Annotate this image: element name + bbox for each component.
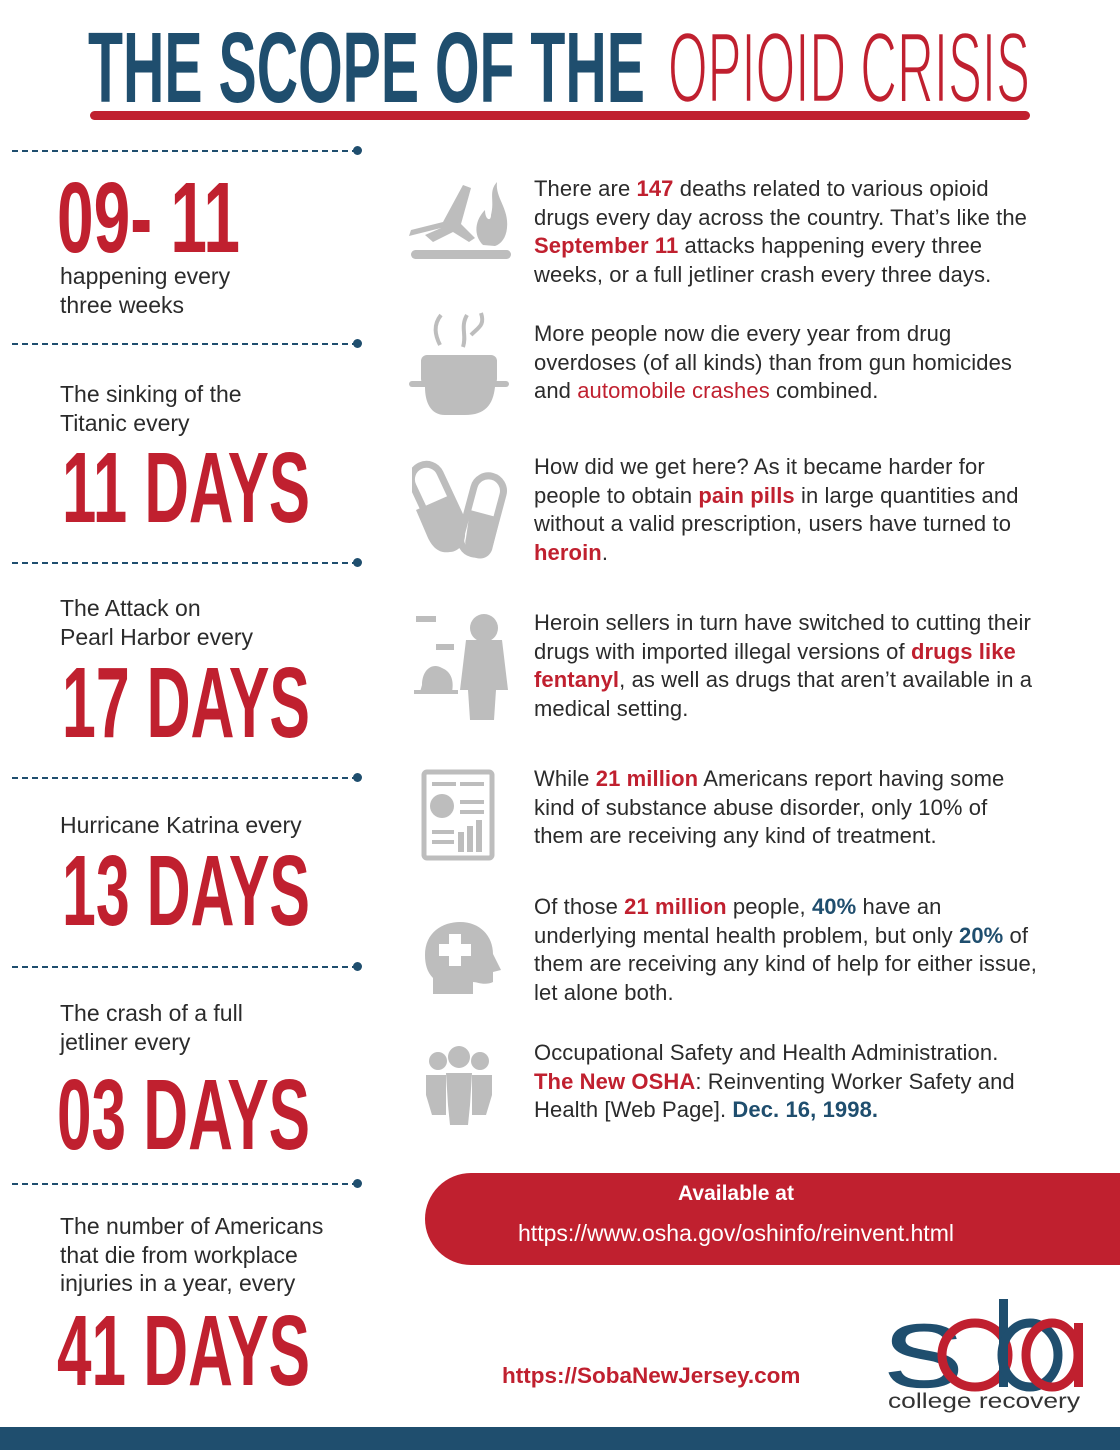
text: 21 million: them are receiving any kind of treatment. (534, 823, 937, 848)
stat: Katrina (60, 812, 310, 933)
text: mental health: let alone both. (534, 980, 674, 1005)
text: mental health (534, 894, 1037, 1005)
text: mental health: underlying mental health problem, but only 20% of (534, 923, 1028, 948)
callout: available at: Available at (678, 1182, 794, 1205)
stat: workplace: The number of Americans (60, 1213, 323, 1239)
stat: jetliner (57, 1000, 310, 1157)
text: how did we get here: How did we get here? As it became harder for (534, 454, 985, 479)
icon: report (422, 770, 494, 860)
text: mental health: them are receiving any kind of help for either issue, (534, 951, 1037, 976)
stat: Katrina: Hurricane Katrina every (60, 812, 302, 838)
text: 21 million (534, 766, 1004, 848)
callout: available at: https://www.osha.gov/oshinfo/reinvent.html (518, 1220, 954, 1246)
text: overdoses: overdoses (of all kinds) than from gun homicides (534, 350, 1012, 375)
text: 21 million: While 21 million Americans report having some (534, 766, 1004, 791)
text: mental health: Of those 21 million people, 40% have an (534, 894, 942, 919)
stat: Pearl Harbor (60, 595, 310, 745)
stat: Titanic (60, 381, 310, 530)
text: 147 deaths: There are 147 deaths related to various opioid (534, 176, 989, 201)
text: fentanyl: fentanyl, as well as drugs that aren’t available in a (534, 667, 1032, 692)
stat: workplace: that die from workplace (60, 1242, 298, 1268)
text: 147 deaths: September 11 attacks happening every three (534, 233, 982, 258)
text: 21 million: kind of substance abuse disorder, only 10% of (534, 795, 987, 820)
website link: https://SobaNewJersey.com (502, 1363, 800, 1388)
text: OSHA source: Health [Web Page]. Dec. 16, 1998. (534, 1097, 878, 1122)
text: overdoses (534, 321, 1012, 403)
stat: 09-11 (57, 170, 240, 318)
stat: Pearl Harbor: Pearl Harbor every (60, 624, 253, 650)
logo: soba (884, 1295, 1083, 1413)
footer bar (0, 1427, 1120, 1450)
text: overdoses: and automobile crashes combined. (534, 378, 878, 403)
stat: Pearl Harbor: The Attack on (60, 595, 201, 621)
text: how did we get here: without a valid prescription, users have turned to (534, 511, 1011, 536)
title: THE SCOPE OF THE (88, 12, 645, 124)
stat: 09-11: happening every (60, 263, 230, 289)
text: 147 deaths: drugs every day across the country. That’s like the (534, 205, 1027, 230)
text: OSHA source: Occupational Safety and Health Administration. (534, 1040, 998, 1065)
stat: jetliner: jetliner every (60, 1029, 190, 1055)
icon: pills (412, 460, 507, 558)
stat: workplace: injuries in a year, every (60, 1270, 295, 1296)
text: 147 deaths (534, 176, 1027, 287)
stat: 09-11: three weeks (60, 292, 184, 318)
icon: heroin dealer (414, 614, 508, 720)
text: fentanyl: medical setting. (534, 696, 688, 721)
stat: jetliner: The crash of a full (60, 1000, 243, 1026)
icon: car wreck (409, 312, 509, 415)
stat: workplace (57, 1213, 323, 1393)
icon: group (426, 1046, 492, 1125)
icon: plane crash (409, 182, 511, 259)
text: fentanyl: Heroin sellers in turn have switched to cutting their (534, 610, 1031, 635)
callout: available at (425, 1173, 1120, 1265)
text: fentanyl: drugs with imported illegal versions of drugs like (534, 639, 1016, 664)
text: how did we get here: heroin. (534, 540, 608, 565)
text: how did we get here: people to obtain pain pills in large quantities and (534, 483, 1019, 508)
stat: Titanic: Titanic every (60, 410, 190, 436)
text: how did we get here (534, 454, 1019, 565)
stat: Titanic: The sinking of the (60, 381, 242, 407)
text: 147 deaths: weeks, or a full jetliner crash every three days. (534, 262, 991, 287)
text: fentanyl (534, 610, 1032, 721)
text: overdoses: More people now die every year from drug (534, 321, 951, 346)
text: OSHA source: The New OSHA: Reinventing Worker Safety and (534, 1069, 1015, 1094)
logo: soba: college recovery (888, 1390, 1081, 1413)
icon: mental health head (425, 922, 501, 994)
text: OSHA source (534, 1040, 1015, 1122)
